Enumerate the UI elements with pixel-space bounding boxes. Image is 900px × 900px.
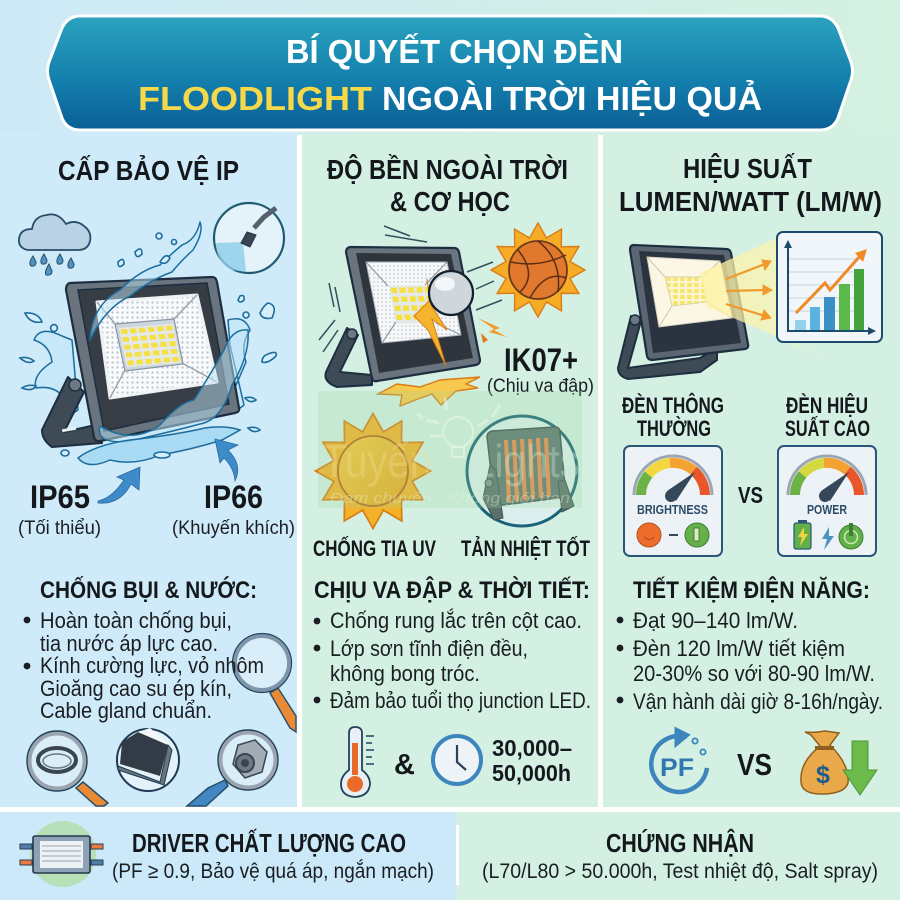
bullet list: impact and weather: Đảm bảo tuổi thọ junction LED.	[330, 688, 591, 713]
footer: driver	[0, 812, 456, 900]
bullet list: dust and water: Kính cường lực, vỏ nhôm	[40, 653, 264, 678]
heading: durability: & CƠ HỌC	[390, 186, 510, 217]
icon: pressure washer nozzle	[214, 203, 284, 273]
bullet list: dust and water	[24, 608, 264, 723]
heading: durability	[327, 153, 568, 217]
label: UV resistance: CHỐNG TIA UV	[313, 535, 436, 561]
watermark: Lights	[472, 435, 580, 487]
icon: impact burst and ball	[319, 226, 507, 366]
icon: UV sun	[316, 414, 430, 528]
watermark	[318, 391, 582, 508]
label: VS gauges: VS	[738, 482, 763, 508]
icon: clock	[433, 736, 481, 784]
watermark: Tuyến	[322, 435, 432, 487]
bullet list: impact and weather	[314, 608, 591, 713]
subtext: certification: (L70/L80 > 50.000h, Test nhiệt độ, Salt spray)	[482, 860, 878, 883]
title banner: NGOÀI TRỜI HIỆU QUẢ	[382, 80, 762, 117]
panel: durability	[302, 133, 598, 807]
bullet list: impact and weather: Lớp sơn tĩnh điện đều,	[330, 636, 528, 661]
label: lifetime hours: 50,000h	[492, 760, 571, 786]
floodlight: efficient unit	[618, 245, 748, 379]
heading: driver: DRIVER CHẤT LƯỢNG CAO	[132, 828, 406, 858]
icon: thermometer	[341, 727, 374, 797]
gauge: power	[778, 446, 876, 556]
icon: housing corner detail	[117, 728, 179, 791]
label: IP66	[172, 479, 295, 539]
heading: efficiency: LUMEN/WATT (LM/W)	[619, 186, 882, 217]
title banner: BÍ QUYẾT CHỌN ĐÈN	[286, 33, 623, 70]
bullet list: energy saving: Đèn 120 lm/W tiết kiệm	[633, 636, 845, 661]
icon: magnifier over text	[232, 634, 296, 732]
icon: heat sink	[467, 416, 577, 526]
illustration: water splashes over floodlight	[20, 222, 276, 465]
bullet list: dust and water: Hoàn toàn chống bụi,	[40, 608, 232, 633]
icon: money bag with down arrow	[801, 731, 877, 795]
arrows: light output	[726, 260, 772, 320]
title banner: FLOODLIGHT	[138, 80, 372, 117]
arrow: to IP66	[215, 439, 238, 481]
icon: ground impact burst	[378, 377, 480, 406]
label: VS savings: VS	[737, 747, 772, 782]
lens	[97, 295, 217, 398]
icon: basketball in sun burst	[491, 223, 585, 317]
panel: IP protection	[0, 133, 297, 807]
label: lifetime hours: 30,000–	[492, 735, 572, 761]
label: standard lamp	[622, 393, 724, 441]
label: efficient lamp: SUẤT CAO	[785, 416, 870, 441]
subheading: dust and water: CHỐNG BỤI & NƯỚC:	[40, 576, 257, 604]
top background band	[0, 0, 900, 135]
floodlight: impact unit	[325, 247, 480, 387]
label: efficient lamp	[785, 393, 870, 441]
label: IP65: (Tối thiểu)	[18, 518, 101, 539]
watermark: Đam chuyên · Không giới hạn	[330, 490, 570, 507]
bullet list: energy saving: 20-30% so với 80-90 lm/W.	[633, 661, 875, 686]
heading: certification: CHỨNG NHẬN	[606, 828, 754, 858]
label: lifetime hours	[492, 735, 572, 786]
floodlight: IP65 unit	[42, 277, 239, 447]
subtext: driver: (PF ≥ 0.9, Bảo vệ quá áp, ngắn mạch)	[112, 860, 434, 883]
label: IP65: IP65	[30, 479, 90, 515]
label: IK07+	[487, 342, 594, 397]
arrow: to IP65	[98, 467, 140, 503]
icon: power factor cycle: PF	[660, 754, 694, 782]
bullet list: dust and water: tia nước áp lực cao.	[40, 631, 218, 656]
label: heat dissipation: TẢN NHIỆT TỐT	[461, 535, 590, 561]
bullet list: impact and weather: không bong tróc.	[330, 661, 480, 686]
label: standard lamp: THƯỜNG	[637, 416, 711, 441]
heading: efficiency: HIỆU SUẤT	[683, 153, 812, 184]
footer: certification	[456, 812, 900, 900]
heading: durability: ĐỘ BỀN NGOÀI TRỜI	[327, 153, 568, 185]
bullet list: energy saving	[617, 608, 883, 714]
heading: efficiency	[619, 153, 882, 217]
symbol: ampersand: &	[394, 749, 415, 781]
icon: money bag with down arrow: $	[816, 761, 830, 789]
icon: power factor cycle	[651, 729, 707, 792]
label: IK07+: IK07+	[504, 342, 578, 378]
bullet list: dust and water: Cable gland chuẩn.	[40, 698, 212, 723]
subheading: energy saving: TIẾT KIỆM ĐIỆN NĂNG:	[633, 576, 870, 604]
icon: rain cloud	[19, 214, 90, 275]
gauge: power: POWER	[807, 502, 847, 517]
icon: growth chart	[777, 232, 882, 342]
panel: efficiency	[603, 133, 900, 807]
droplets	[20, 249, 276, 432]
title banner	[48, 16, 852, 130]
subheading: impact and weather: CHỊU VA ĐẬP & THỜI TIẾT:	[314, 576, 590, 604]
gauge: brightness: BRIGHTNESS	[637, 502, 708, 517]
icon: LED driver	[20, 821, 103, 887]
label: IP66: (Khuyến khích)	[172, 518, 295, 539]
icon: magnifier on rubber gasket	[27, 731, 108, 806]
heading: IP rating: CẤP BẢO VỆ IP	[58, 154, 239, 186]
label: efficient lamp: ĐÈN HIỆU	[786, 393, 868, 418]
illustration: splash behind floodlight	[34, 319, 250, 428]
icon: magnifier on cable gland	[187, 730, 278, 806]
label: IP65	[18, 479, 101, 539]
body	[66, 277, 239, 441]
gauge: brightness	[624, 446, 722, 556]
label: standard lamp: ĐÈN THÔNG	[622, 393, 724, 418]
label: IK07+: (Chịu va đập)	[487, 376, 594, 397]
bullet list: dust and water: Gioăng cao su ép kín,	[40, 676, 232, 701]
label: IP66: IP66	[204, 479, 263, 515]
LED module	[115, 319, 183, 371]
bullet list: impact and weather: Chống rung lắc trên cột cao.	[330, 608, 582, 633]
stand	[42, 377, 102, 447]
bullet list: energy saving: Đạt 90–140 lm/W.	[633, 608, 798, 633]
light beam	[700, 238, 833, 360]
